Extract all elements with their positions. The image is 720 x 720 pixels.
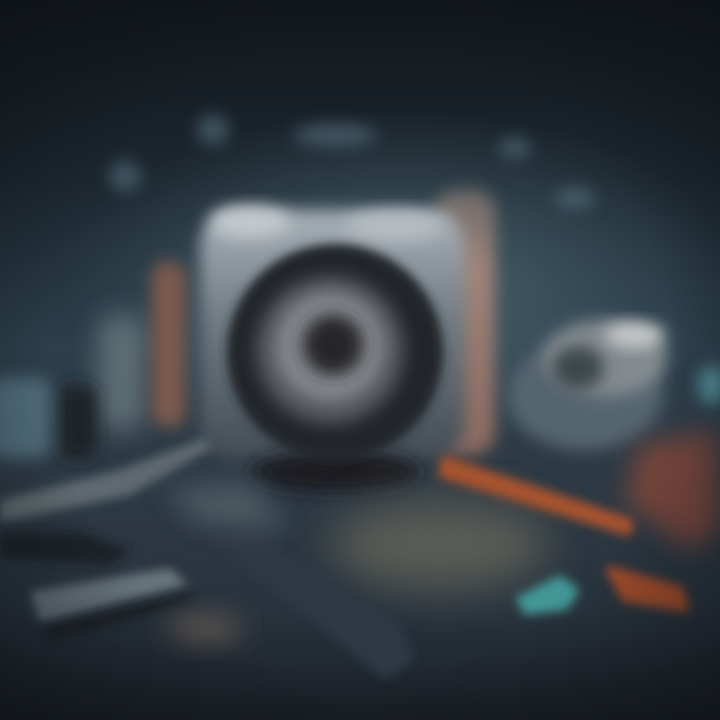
- lens mid ring: [256, 276, 404, 424]
- left blurred objects: [0, 262, 186, 460]
- lens outer ring: [227, 244, 443, 460]
- left wrench and dark tools: [0, 438, 415, 680]
- orange tools: [442, 430, 720, 608]
- scattered debris on the table: [330, 500, 550, 590]
- right pink housing behind camera: [435, 190, 495, 455]
- camera base shadow: [250, 452, 420, 492]
- camera: [200, 206, 465, 492]
- floating background specks: [109, 115, 595, 208]
- lens inner: [303, 315, 363, 375]
- right silver object: [507, 320, 720, 450]
- teal fragment: [515, 575, 580, 615]
- camera body: [200, 210, 465, 460]
